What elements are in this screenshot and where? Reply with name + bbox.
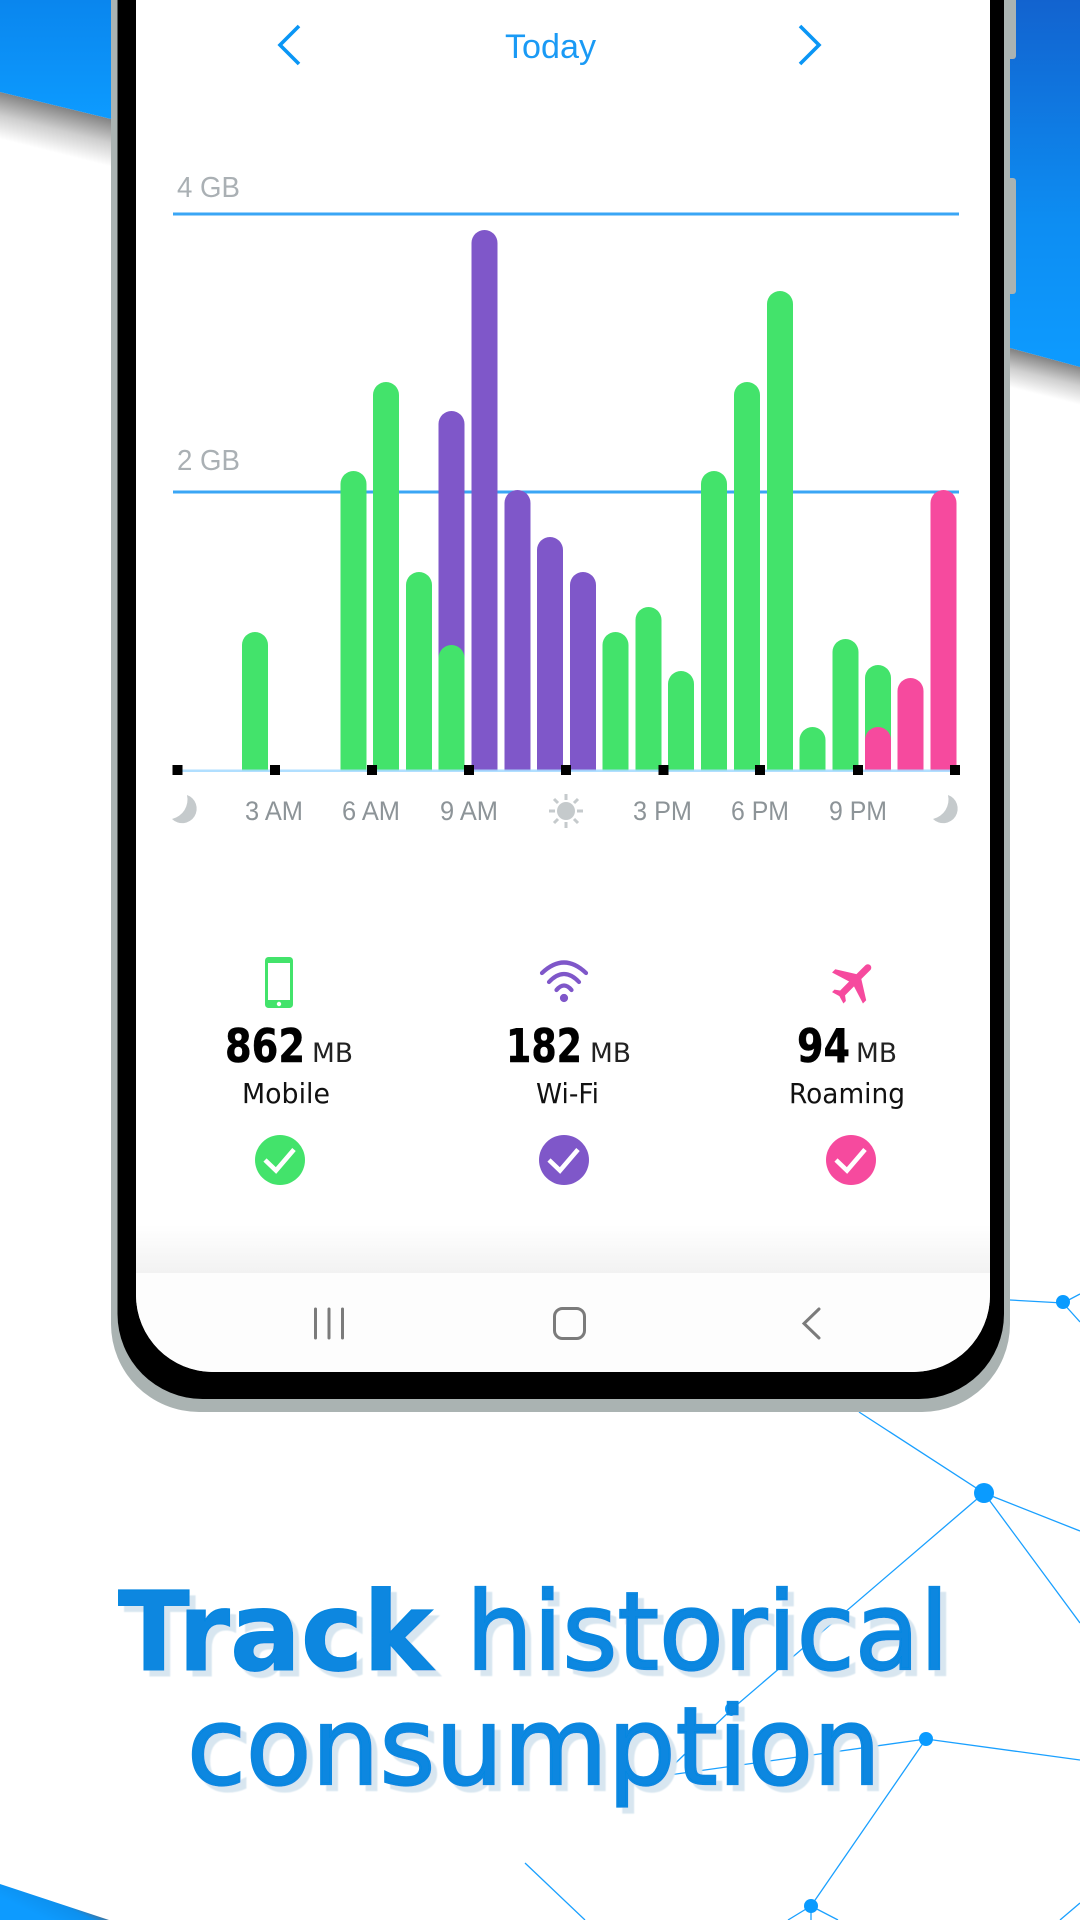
time axis labels: [245, 796, 887, 826]
value 182 MB: MB: [590, 1038, 631, 1069]
icon: purple check: [539, 1135, 589, 1185]
value 862 MB: 862: [225, 1019, 305, 1073]
icon: sun: [549, 794, 583, 828]
bar chart: [172, 172, 960, 830]
phone black bezel: [118, 0, 1004, 1399]
icon: phone: [265, 957, 293, 1008]
label wi-fi: Wi-Fi: [536, 1077, 599, 1110]
stat: roaming: [789, 950, 905, 1185]
top left blue banner: [0, 0, 111, 175]
date label: Today: [505, 28, 596, 66]
phone screen: [136, 0, 990, 1372]
time axis labels: 3 AM: [245, 796, 303, 826]
mobile, wifi and roaming bars: [242, 230, 956, 830]
icon: wifi: [542, 962, 586, 1000]
time axis labels: 6 AM: [342, 796, 400, 826]
label mobile: Mobile: [242, 1077, 330, 1110]
title: Track: [118, 1568, 436, 1696]
value 94 MB: [797, 1019, 897, 1073]
2 GB gridline label: 2 GB: [177, 445, 240, 477]
icon: right moon: [933, 795, 958, 823]
bottom left blue corner: [0, 1884, 109, 1920]
icon: plane: [822, 950, 886, 1013]
icon: recent apps: [316, 1309, 342, 1338]
title: [118, 1568, 949, 1810]
phone: [111, 0, 1016, 1412]
icon: green check: [255, 1135, 305, 1185]
icon: back button: [804, 1309, 819, 1338]
title: consumption: [187, 1685, 881, 1810]
value 862 MB: MB: [312, 1038, 353, 1069]
navigation bar: [136, 1225, 990, 1372]
time axis labels: 9 PM: [829, 796, 887, 826]
top right blue banner: [1010, 0, 1080, 415]
stat: wi-fi: [506, 962, 631, 1185]
icon: next chevron: [800, 26, 819, 64]
4 GB gridline label: 4 GB: [177, 172, 240, 204]
icon: left moon: [172, 795, 197, 823]
value 94 MB: 94: [797, 1019, 850, 1073]
side button lower: [1005, 178, 1016, 294]
icon: home button: [554, 1308, 584, 1338]
icon: pink check: [826, 1135, 876, 1185]
side button top: [1005, 0, 1016, 59]
time axis labels: 9 AM: [440, 796, 498, 826]
title: historical: [466, 1570, 949, 1695]
date navigation: [280, 26, 819, 66]
stat: mobile: [225, 957, 353, 1185]
label roaming: Roaming: [789, 1077, 905, 1110]
icon: previous chevron: [280, 26, 299, 64]
phone silver body: [111, 0, 1010, 1412]
value 94 MB: MB: [856, 1038, 897, 1069]
network lines decoration: [525, 1294, 1080, 1920]
time axis labels: 3 PM: [633, 796, 692, 826]
axis tick marks: [172, 765, 960, 775]
time axis labels: 6 PM: [731, 796, 789, 826]
value 182 MB: 182: [506, 1019, 582, 1073]
